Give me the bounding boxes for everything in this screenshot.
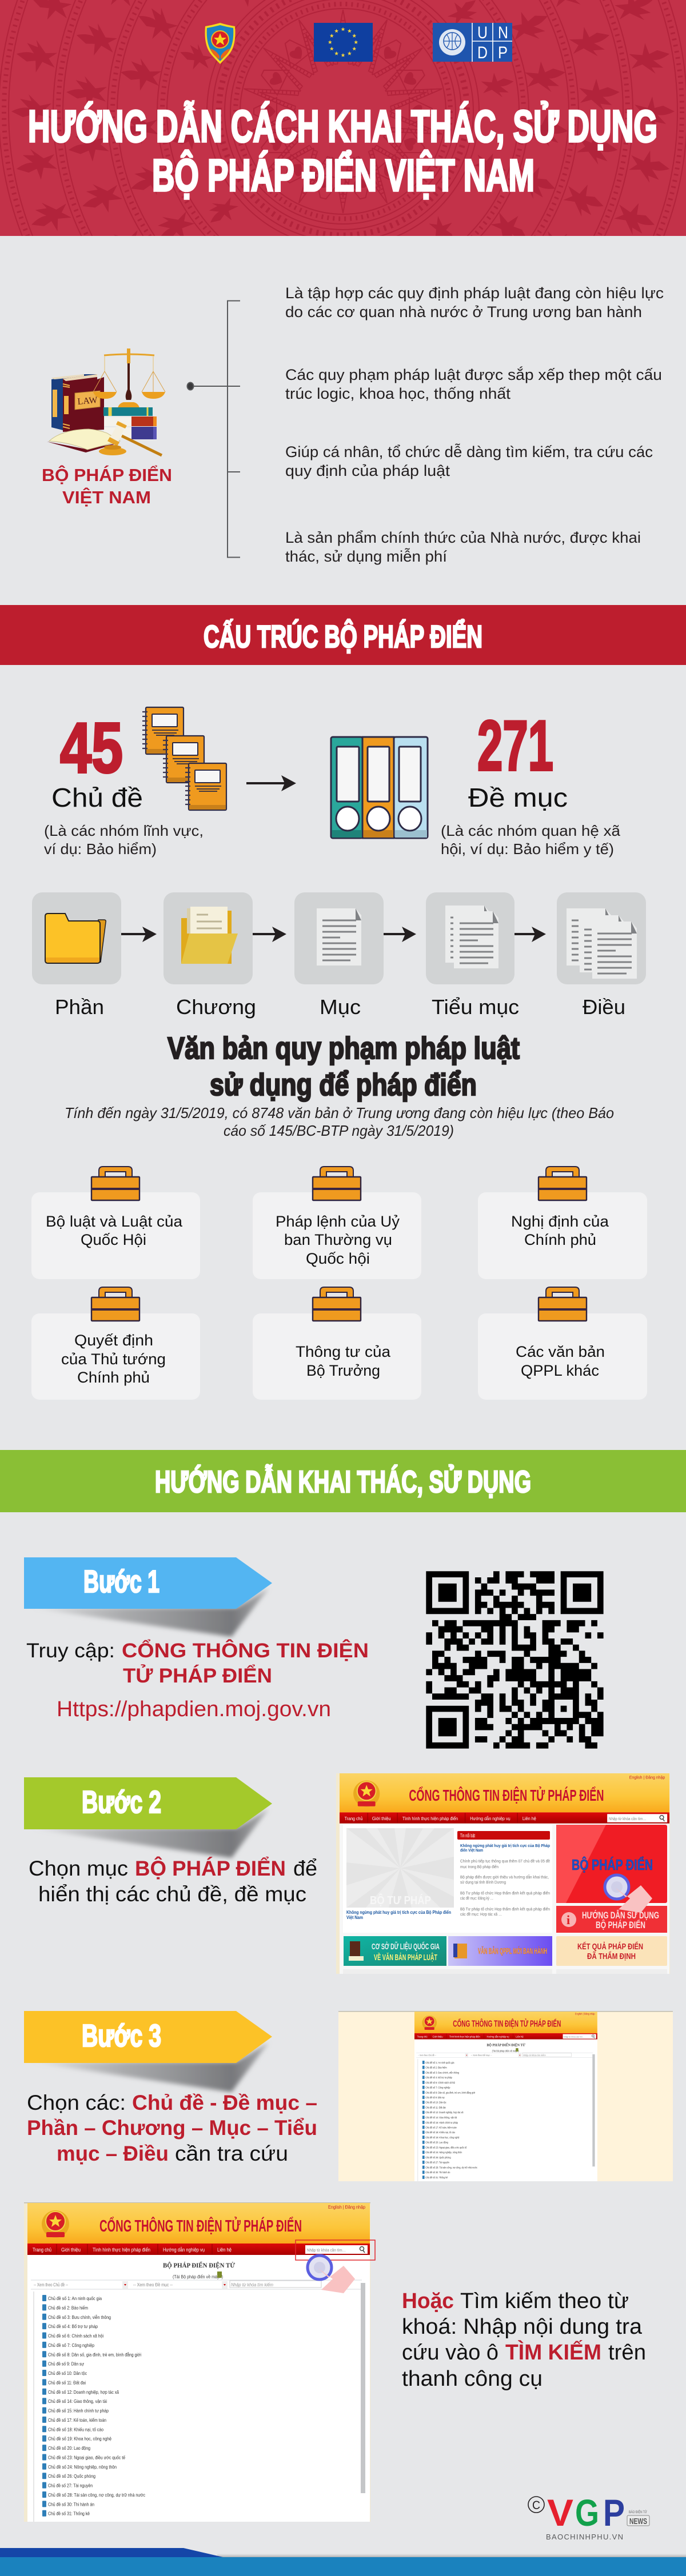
text: step 3 instruction: cần tra cứu <box>175 2142 288 2165</box>
panel: definition of the code <box>42 285 664 565</box>
screenshot: topic list <box>338 2011 673 2182</box>
step tile: Mục <box>294 892 384 1019</box>
screenshot: portal home page: Không ngừng phát huy giá trị tích cực của Bộ Pháp <box>460 1843 550 1848</box>
screenshot: search box: Chủ đề số 1: An ninh quốc gia <box>48 2295 102 2301</box>
number: 271 headings: 271 <box>477 707 553 786</box>
section header: Hướng dẫn khai thác: HƯỚNG DẪN KHAI THÁC, SỬ DỤNG <box>155 1464 531 1499</box>
screenshot: search box: Chủ đề số 20: Lao động <box>48 2445 90 2451</box>
card: Thông tư <box>253 1287 421 1400</box>
text: step 2 instruction: hiển thị các chủ đề, đề mục <box>38 1882 306 1906</box>
shadow <box>29 1809 269 1858</box>
icon: binders <box>331 737 428 838</box>
heading: legal documents: Văn bản quy phạm pháp luật <box>167 1031 520 1065</box>
logo: UNDP: P <box>498 43 508 62</box>
screenshot: search box: Chủ đề số 7: Công nghiệp <box>48 2342 94 2348</box>
screenshot: portal home page: ĐÃ THẨM ĐỊNH <box>587 1951 636 1961</box>
screenshot: search box: Chủ đề số 30: Thi hành án <box>48 2501 94 2507</box>
number: 271 headings: Đề mục <box>468 783 568 812</box>
screenshot: portal home page: Việt Nam <box>346 1915 363 1920</box>
arrow <box>246 775 296 791</box>
text: definition points: do các cơ quan nhà nước ở Trung ương ban hành <box>285 303 642 321</box>
screenshot: search box: Trang chủ <box>33 2247 51 2253</box>
card: Nghị định: Nghị định của <box>511 1213 609 1230</box>
screenshot: search box: CỔNG THÔNG TIN ĐIỆN TỬ PHÁP ĐIỂN <box>99 2216 302 2236</box>
heading: Bộ pháp điển Việt Nam: BỘ PHÁP ĐIỂN <box>42 464 172 485</box>
panel: hierarchy flow <box>32 892 646 1019</box>
step tile: Chương <box>163 892 256 1019</box>
icon: law books, scales and gavel <box>47 348 165 455</box>
screenshot: search box: Nhập từ khóa tìm kiếm <box>231 2282 273 2287</box>
text: step 3 instruction: Chọn các: <box>27 2091 126 2114</box>
heading: legal documents: sử dụng để pháp điển <box>210 1068 477 1102</box>
screenshot: search box <box>24 2202 370 2522</box>
screenshot: search box: Chủ đề số 4: Bổ trợ tư pháp <box>48 2323 98 2329</box>
text: italic note <box>65 1104 614 1139</box>
logo: EU flag <box>314 23 373 62</box>
text: definition points <box>285 285 664 565</box>
card: Bộ luật và Luật: Bộ luật và Luật của <box>46 1213 183 1230</box>
arrow <box>253 927 286 942</box>
text: italic note: Tính đến ngày 31/5/2019, có 8748 văn bản ở Trung ương đang còn hiệu lực (theo Báo <box>65 1104 614 1121</box>
screenshot: portal home page: BỘ TƯ PHÁP <box>370 1893 431 1907</box>
number: 45 topics: Chủ đề <box>51 783 143 812</box>
step tile: Điều: Điều <box>583 995 625 1019</box>
card: Quyết định <box>31 1287 200 1400</box>
screenshot: portal home page: các đề mục: Đăng ký … <box>460 1896 493 1901</box>
screenshot: portal home page: CƠ SỞ DỮ LIỆU QUỐC GIA <box>372 1941 440 1952</box>
logo: VGP News: V <box>547 2491 573 2534</box>
step tile: Chương: Chương <box>176 995 256 1019</box>
text: italic note: cáo số 145/BC-BTP ngày 31/5/2019) <box>224 1122 454 1139</box>
shadow <box>29 1588 269 1637</box>
screenshot: search box: Chủ đề số 19: Khoa học, công nghệ <box>48 2436 111 2442</box>
screenshot: search box: Chủ đề số 26: Quốc phòng <box>48 2473 95 2479</box>
text: definition points: Là sản phẩm chính thức của Nhà nước, được khai <box>285 529 641 546</box>
card: Nghị định: Chính phủ <box>524 1231 596 1248</box>
screenshot: search box: Chủ đề số 12: Doanh nghiệp, hợp tác xã <box>48 2389 119 2395</box>
panel: document types <box>31 1167 647 1400</box>
logo: UNDP: U <box>477 23 488 42</box>
screenshot: portal home page: VĂN BẢN QPPL MỚI BAN HÀNH <box>478 1946 547 1956</box>
text: step 3 instruction: Chủ đề - Đề mục – <box>132 2091 317 2114</box>
screenshot: search box: Chủ đề số 2: Bảo hiểm <box>48 2305 88 2310</box>
title <box>28 101 657 201</box>
card: Các văn bản khác <box>478 1287 647 1400</box>
screenshot: search box: Hướng dẫn nghiệp vụ <box>163 2247 205 2253</box>
screenshot: search box: Tình hình thực hiện pháp điển <box>93 2247 150 2253</box>
card: Quyết định: của Thủ tướng <box>61 1351 166 1368</box>
screenshot: portal home page: Chính phủ tiếp tục thông qua thêm 07 chủ đề và 05 đề <box>460 1858 550 1864</box>
header background: bronze drum pattern <box>0 0 686 236</box>
logo: VGP News: C <box>532 2499 540 2512</box>
panel: step 3 <box>24 2011 673 2182</box>
text: keyword search instruction: khoá: Nhập nội dung tra <box>402 2315 643 2339</box>
screenshot: portal home page <box>336 1773 670 1974</box>
number: 45 topics: (Là các nhóm lĩnh vực, <box>44 822 204 839</box>
screenshot: portal home page: các đề mục: Hợp tác xã … <box>460 1912 502 1917</box>
logo: VGP News: G <box>575 2491 599 2534</box>
card: Bộ luật và Luật <box>31 1167 200 1279</box>
screenshot: search box: Chủ đề số 9: Dân sự <box>48 2361 84 2367</box>
step badge: Bước 3 <box>24 2011 272 2063</box>
logo: VGP News: P <box>603 2491 625 2534</box>
screenshot: search box: -- Xem theo Chủ đề -- <box>34 2282 68 2287</box>
screenshot: search box: Chủ đề số 18: Khiếu nại, tố cáo <box>48 2426 103 2432</box>
connector bracket <box>188 301 240 558</box>
logo: VGP News: BAOCHINHPHU.VN <box>546 2533 623 2541</box>
text: step 3 instruction: Phần – Chương – Mục – Tiểu <box>27 2116 317 2140</box>
panel: step 4 search <box>24 2202 646 2522</box>
text: keyword search instruction: trên <box>608 2341 646 2365</box>
section header: Hướng dẫn khai thác <box>0 1450 686 1512</box>
card: Pháp lệnh: ban Thường vụ <box>284 1231 392 1248</box>
text: keyword search instruction <box>402 2289 646 2391</box>
text: definition points: thác, sử dụng miễn phí <box>285 547 447 565</box>
step tile: Tiểu mục: Tiểu mục <box>432 995 519 1019</box>
step badge: Bước 3: Bước 3 <box>82 2018 161 2053</box>
screenshot: search box: Liên hệ <box>217 2247 232 2253</box>
screenshot: portal home page: sử dụng tại tỉnh Bình Dương <box>460 1880 506 1885</box>
step badge: Bước 2: Bước 2 <box>82 1784 161 1820</box>
text: portal name: TỬ PHÁP ĐIỂN <box>123 1664 272 1687</box>
screenshot: portal home page: Tin nổi bật <box>460 1833 475 1838</box>
QR code <box>426 1571 604 1749</box>
panel: step 2 <box>24 1773 670 1974</box>
logo: UNDP: N <box>498 23 508 42</box>
text: definition points: Là tập hợp các quy định pháp luật đang còn hiệu lực <box>285 285 664 302</box>
text: keyword search instruction: TÌM KIẾM <box>505 2339 601 2365</box>
logo: police badge <box>205 23 236 64</box>
screenshot: search box: Chủ đề số 28: Tài sản công, nợ công, dự trữ nhà nước <box>48 2492 146 2498</box>
screenshot: search box: Chủ đề số 27: Tài nguyên <box>48 2483 93 2489</box>
number: 45 topics: 45 <box>60 709 123 788</box>
text: step 3 instruction <box>27 2091 317 2165</box>
logo: UNDP <box>433 23 512 62</box>
screenshot: search box: Chủ đề số 10: Dân tộc <box>48 2370 87 2376</box>
screenshot: portal home page: VỀ VĂN BẢN PHÁP LUẬT <box>374 1952 437 1962</box>
panel: step 1 <box>24 1557 604 1749</box>
screenshot: search box: Giới thiệu <box>61 2247 81 2253</box>
screenshot: portal home page: Bộ Tư pháp tổ chức Họp thẩm định kết quả pháp điển <box>460 1890 550 1896</box>
text: definition points: quy định của pháp luật <box>285 462 450 479</box>
card: Thông tư: Bộ Trưởng <box>306 1362 380 1379</box>
arrow <box>384 927 416 942</box>
screenshot: portal home page: điển Việt Nam <box>460 1848 483 1853</box>
screenshot: portal home page: mục trong Bộ pháp điển <box>460 1864 498 1869</box>
text: definition points: trúc logic, khoa học, thống nhất <box>285 385 511 402</box>
step tile: Phần: Phần <box>55 995 104 1019</box>
step tile: Mục: Mục <box>320 995 361 1019</box>
number: 271 headings: (Là các nhóm quan hệ xã <box>441 822 621 839</box>
card: Pháp lệnh: Pháp lệnh của Uỷ <box>276 1213 400 1230</box>
callout: red search highlight <box>296 2240 375 2260</box>
screenshot: search box: Chủ đề số 24: Nông nghiệp, nông thôn <box>48 2464 117 2470</box>
screenshot: search box: Chủ đề số 8: Dân số, gia đình, trẻ em, bình đẳng giới <box>48 2351 141 2357</box>
icon: law books, scales and gavel: LAW <box>77 395 98 407</box>
screenshot: search box: Chủ đề số 3: Bưu chính, viễn thông <box>48 2314 111 2320</box>
heading: Bộ pháp điển Việt Nam: VIỆT NAM <box>62 487 151 507</box>
icon: pointing hand <box>605 1875 652 1913</box>
logo: UNDP: D <box>477 43 488 62</box>
screenshot: search box: Chủ đề số 14: Giao thông, vận tải <box>48 2398 107 2404</box>
screenshot: portal home page: Bộ pháp điển được giới thiệu và hướng dẫn khai thác, <box>460 1874 549 1880</box>
text: step 3 instruction: mục – Điều <box>57 2142 169 2165</box>
section header: Cấu trúc Bộ pháp điển: CẤU TRÚC BỘ PHÁP ĐIỂN <box>204 619 482 654</box>
screenshot: portal home page: BỘ PHÁP ĐIỂN <box>572 1856 653 1873</box>
step badge: Bước 1 <box>24 1557 272 1609</box>
screenshot: search box: Chủ đề số 15: Hành chính tư pháp <box>48 2408 109 2414</box>
text: portal name: CỔNG THÔNG TIN ĐIỆN <box>122 1639 369 1662</box>
heading: Bộ pháp điển Việt Nam <box>42 464 172 507</box>
screenshot: search box: -- Xem theo Đề mục -- <box>133 2282 173 2287</box>
icon: notebooks <box>142 707 226 810</box>
screenshot: search box: Chủ đề số 31: Thống kê <box>48 2511 90 2517</box>
section header: Cấu trúc Bộ pháp điển <box>0 605 686 665</box>
logo: VGP News: BÁO ĐIỆN TỬ <box>629 2510 647 2514</box>
screenshot: portal home page: KẾT QUẢ PHÁP ĐIỂN <box>577 1941 643 1952</box>
text: portal name <box>26 1639 369 1721</box>
text: step 2 instruction: để <box>293 1857 317 1880</box>
screenshot: search box: English | Đăng nhập <box>328 2205 365 2210</box>
screenshot: portal home page: Không ngừng phát huy giá trị tích cực của Bộ Pháp điển <box>346 1910 451 1915</box>
step badge: Bước 2 <box>24 1777 272 1829</box>
card: Quyết định: Chính phủ <box>77 1369 150 1386</box>
text: portal name: Truy cập: <box>26 1640 115 1662</box>
screenshot: search box: Chủ đề số 6: Chính sách xã hội <box>48 2333 103 2339</box>
card: Bộ luật và Luật: Quốc Hội <box>81 1231 146 1248</box>
card: Pháp lệnh <box>253 1167 421 1279</box>
card: Các văn bản khác: Các văn bản <box>516 1343 605 1360</box>
screenshot: search box: Nhập từ khóa cần tìm… <box>307 2248 346 2253</box>
text: definition points: Các quy phạm pháp luật được sắp xếp thep một cấu <box>285 366 662 383</box>
heading: legal documents <box>167 1031 520 1102</box>
panel: red header <box>0 0 686 236</box>
number: 271 headings <box>441 707 621 858</box>
card: Nghị định <box>478 1167 647 1279</box>
panel: topics and headings <box>44 707 621 858</box>
text: step 2 instruction <box>29 1856 317 1906</box>
text: definition points: Giúp cá nhân, tổ chức dễ dàng tìm kiếm, tra cứu các <box>285 443 653 460</box>
arrow <box>121 927 157 942</box>
number: 271 headings: hội, ví dụ: Bảo hiểm y tế) <box>441 840 614 858</box>
number: 45 topics <box>44 709 204 858</box>
card: Các văn bản khác: QPPL khác <box>521 1362 599 1379</box>
logo: VGP News: NEWS <box>629 2517 647 2526</box>
screenshot: portal home page: i <box>567 1913 570 1927</box>
screenshot: search box: (Tải Bộ pháp điển về máy: ) <box>173 2274 223 2279</box>
screenshot: portal home page: BỘ PHÁP ĐIỂN <box>596 1920 645 1930</box>
text: keyword search instruction: Tìm kiếm theo từ <box>460 2289 629 2313</box>
card: Quyết định: Quyết định <box>74 1332 153 1349</box>
text: keyword search instruction: Hoặc <box>402 2289 454 2313</box>
step tile: Phần <box>32 892 121 1019</box>
screenshot: search box: Chủ đề số 23: Ngoại giao, điều ước quốc tế <box>48 2454 125 2460</box>
number: 45 topics: ví dụ: Bảo hiểm) <box>44 840 157 858</box>
shadow <box>29 2042 269 2092</box>
screenshot: search box: Chủ đề số 17: Kế toán, kiểm toán <box>48 2417 106 2423</box>
text: portal name: Https://phapdien.moj.gov.vn <box>57 1697 331 1721</box>
card: Pháp lệnh: Quốc hội <box>306 1250 370 1267</box>
text: step 2 instruction: BỘ PHÁP ĐIỂN <box>135 1856 286 1880</box>
icon: pointing hand <box>308 2255 355 2293</box>
text: keyword search instruction: cứu vào ô <box>402 2341 498 2365</box>
step badge: Bước 1: Bước 1 <box>83 1564 159 1599</box>
screenshot: portal home page: Bộ Tư pháp tổ chức Họp thẩm định kết quả pháp điển <box>460 1906 550 1912</box>
step tile: Tiểu mục <box>426 892 519 1019</box>
logo: VGP News <box>528 2491 649 2541</box>
card: Thông tư: Thông tư của <box>296 1343 391 1360</box>
screenshot: search box: BỘ PHÁP ĐIỂN ĐIỆN TỬ <box>163 2261 235 2269</box>
footer band <box>0 2548 686 2576</box>
text: keyword search instruction: thanh công cụ <box>402 2367 543 2391</box>
arrow <box>514 927 546 942</box>
step tile: Điều <box>557 892 646 1019</box>
screenshot: search box: Chủ đề số 11: Đất đai <box>48 2379 86 2385</box>
text: step 2 instruction: Chọn mục <box>29 1857 128 1880</box>
